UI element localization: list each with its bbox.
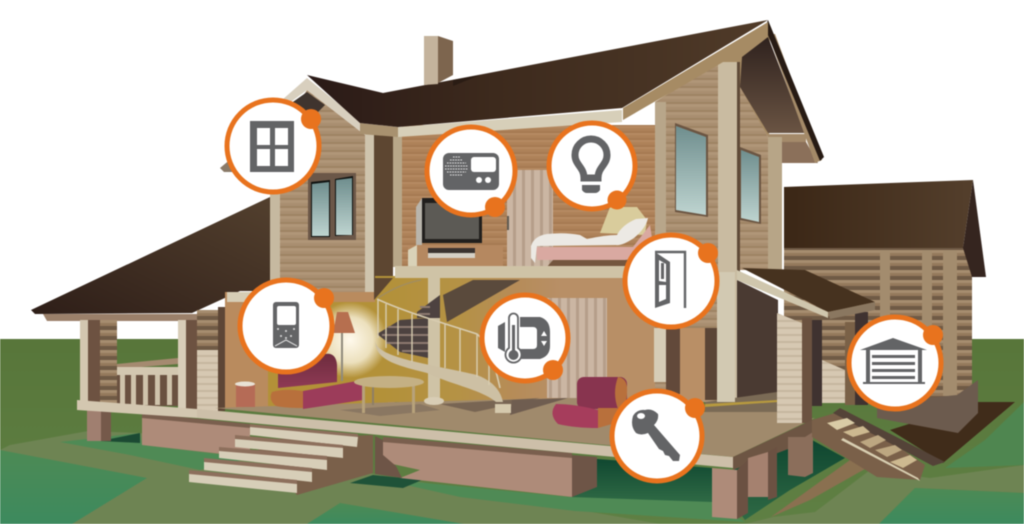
callout: remote control: [240, 280, 334, 372]
spiral steps: [377, 295, 440, 358]
gable fascia: [282, 78, 361, 132]
porch footing: [87, 409, 111, 441]
gable soffit band: [623, 22, 768, 120]
icon: open door: [655, 252, 685, 308]
main cream post: [718, 62, 737, 402]
main gable walls and roof, rear parts: [655, 20, 824, 402]
spiral staircase: [375, 280, 511, 413]
wing gable: [963, 180, 986, 277]
icon: remote control: [273, 302, 299, 348]
wing siding wall: [784, 246, 972, 402]
left armchair: [271, 354, 363, 409]
front steps: [189, 424, 358, 493]
sky background: [0, 0, 1024, 339]
porch deck edge: [77, 400, 197, 418]
wedge below floor beam: [374, 278, 393, 300]
floor lamp: [333, 312, 355, 381]
callout: garage door: [849, 317, 943, 409]
chimney: [424, 36, 453, 85]
icon: garage: [860, 338, 927, 384]
radiator: [547, 298, 607, 398]
front doorway: [737, 280, 778, 402]
central column: [424, 278, 444, 405]
deck floor: [215, 398, 815, 457]
upper floor beam: [395, 266, 655, 278]
television: [408, 198, 503, 268]
bed: [531, 218, 652, 268]
gable front wall: [655, 65, 718, 402]
porch: [31, 197, 270, 415]
rear post: [788, 432, 813, 477]
callout: door key: [612, 391, 705, 481]
floor shadows: [440, 398, 540, 412]
porch roof: [31, 197, 270, 314]
right porch post: [178, 310, 218, 415]
small porch roof: [742, 268, 875, 312]
right wing of the house: [784, 180, 1015, 463]
exterior side stairs: [812, 408, 945, 481]
wing wall: [280, 90, 365, 292]
left porch post: [80, 320, 117, 404]
bedside lamp: [600, 207, 647, 235]
lower gable under soffit: [782, 142, 818, 163]
waste bin: [235, 382, 255, 407]
upper right soffit: [740, 37, 805, 133]
main roof: [307, 20, 768, 127]
top cream beam: [398, 110, 622, 137]
upper room: [360, 22, 768, 270]
main deck edge: [197, 409, 733, 468]
left foundation: [142, 415, 250, 457]
front post: [712, 460, 748, 519]
left upper wing: [220, 78, 402, 302]
gable shadow triangle: [290, 92, 325, 120]
ground: [0, 339, 1024, 524]
lower centre pillars: [654, 328, 717, 400]
right armchair: [552, 377, 627, 428]
foundation and under-deck: [77, 400, 945, 520]
icon: key: [632, 410, 680, 461]
dark shadows: [100, 433, 140, 443]
callout: window sensor: [227, 100, 321, 192]
icon: thermostat: [498, 314, 550, 363]
coffee table: [354, 376, 424, 413]
wing ground shadow: [890, 402, 1015, 463]
icon: radio: [443, 153, 499, 190]
right siding post: [777, 313, 802, 423]
gable windows: [675, 123, 761, 224]
curtain: [507, 170, 553, 268]
icon: window: [250, 121, 294, 172]
window: [308, 173, 356, 240]
middle post: [748, 447, 777, 500]
upper wall wood: [402, 125, 655, 270]
callout: thermostat: [482, 295, 568, 381]
post below porch roof: [717, 272, 735, 402]
icon: light bulb: [575, 139, 607, 193]
right foundation: [383, 440, 572, 497]
lower left wall: [218, 307, 225, 411]
callout: light bulb: [549, 123, 635, 210]
wing roof: [784, 180, 973, 248]
lamp glow: [312, 302, 388, 378]
callout: radio: [427, 127, 515, 217]
stair block: [250, 435, 373, 495]
brown ramp: [771, 460, 872, 517]
lower room: [215, 266, 875, 457]
lower right wall: [375, 276, 655, 402]
callout: door sensor: [625, 235, 718, 327]
upper stair flight: [443, 280, 520, 322]
railing: [117, 358, 179, 406]
gable backing: [655, 30, 780, 137]
right gable wall: [740, 87, 768, 270]
wing stone base: [877, 380, 978, 433]
